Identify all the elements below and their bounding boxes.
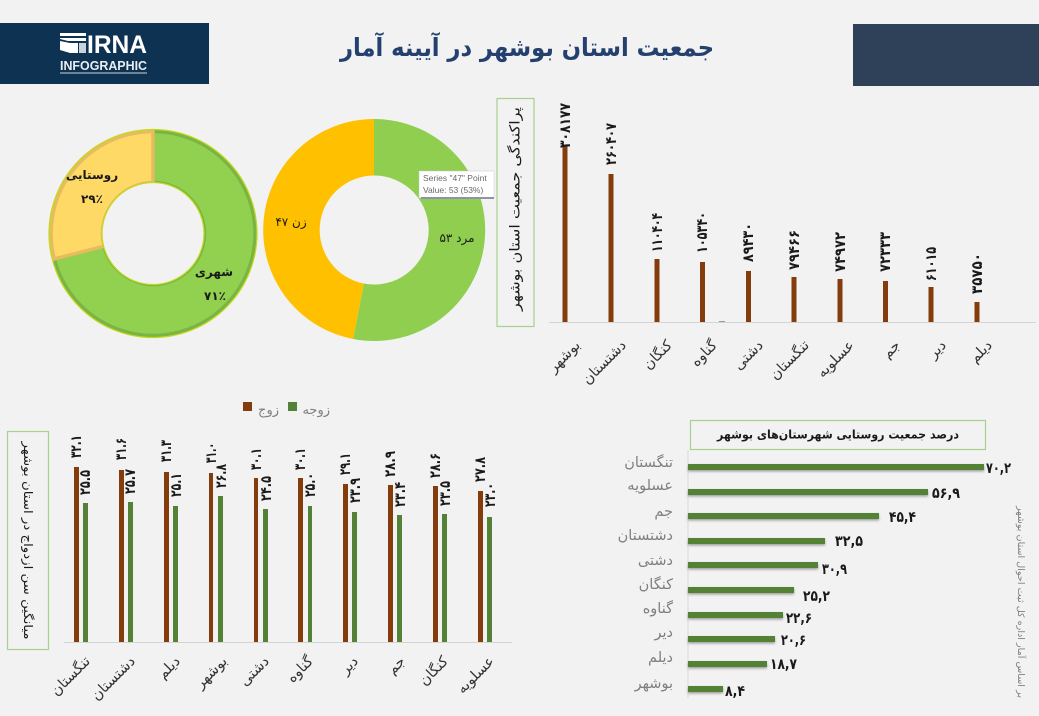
category labels: عسلویه: [454, 654, 498, 697]
bride value labels: ۲۶.۸: [212, 464, 230, 488]
bride value labels: ۲۵.۰: [301, 473, 319, 497]
groom value labels: ۳۰.۱: [247, 448, 265, 470]
icon: IRNA flag mark: [60, 33, 86, 53]
segment: rural 29%: [51, 132, 153, 259]
category labels: دشتی: [731, 338, 767, 374]
segment: men 53: [353, 119, 485, 341]
category labels: دیر: [925, 338, 950, 363]
category labels: دیر: [654, 625, 673, 641]
logo wordmark: IRNA: [87, 31, 147, 59]
category labels: بوشهر: [634, 676, 673, 692]
tooltip: Value: 53 (53%): [423, 185, 483, 195]
label: rural value: ۲۹٪: [81, 192, 103, 206]
value labels: ۳۰,۹: [822, 560, 847, 578]
category labels: دیلم: [155, 654, 184, 682]
category labels: جم: [384, 654, 409, 678]
label: rural: روستایی: [66, 168, 118, 183]
header band: right block: [853, 24, 1039, 86]
category labels: دیلم: [648, 650, 673, 666]
groom value labels: ۲۸.۶: [426, 453, 444, 478]
category labels: کنگان: [416, 653, 452, 689]
value labels: ۱۰۵۳۴۰: [693, 212, 711, 253]
bars: [688, 464, 984, 692]
category labels: دشتی: [237, 654, 273, 690]
groom value labels: ۲۷.۸: [471, 457, 489, 482]
label: women: زن ۴۷: [275, 215, 307, 230]
category labels: تنگستان: [624, 454, 673, 471]
heading box: population distribution: پراکندگی جمعیت استان بوشهر: [506, 107, 524, 312]
value labels: ۷۰,۲: [986, 459, 1011, 477]
category labels: دیر: [337, 654, 362, 679]
bride value labels: ۲۳.۹: [346, 478, 364, 503]
legend: زوجه: [302, 403, 330, 418]
value labels: ۷۴۹۷۲: [831, 232, 849, 272]
groom value labels: [67, 435, 489, 482]
category labels: [47, 653, 498, 704]
label: men: مرد ۵۳: [439, 231, 475, 246]
bride bars: [83, 496, 492, 642]
bar chart: marriage age by county: [47, 435, 512, 704]
category labels: گناوه: [643, 600, 673, 617]
groom bars: [74, 467, 483, 642]
category labels: دیلم: [967, 338, 996, 366]
category labels: جم: [879, 338, 904, 362]
value labels: ۳۵۷۵۰: [968, 253, 986, 294]
heading box: rural population percentage: درصد جمعیت روستایی شهرستان‌های بوشهر: [716, 428, 959, 442]
category labels: تنگستان: [47, 653, 94, 699]
value labels: ۸,۴: [725, 682, 745, 700]
heading box: average marriage age: میانگین سن ازدواج در استان بوشهر: [20, 440, 35, 640]
category labels: [618, 454, 673, 692]
bride value labels: ۲۵.۵: [76, 470, 94, 495]
label: urban value: ۷۱٪: [204, 289, 226, 303]
category labels: گناوه: [687, 337, 721, 370]
category labels: تنگستان: [766, 337, 813, 383]
category labels: عسلویه: [814, 338, 858, 381]
bride value labels: ۲۵.۱: [167, 473, 185, 497]
value labels: ۲۵,۲: [803, 587, 830, 605]
source note: بر اساس آمار اداره کل ثبت احوال استان بوشهر: [1015, 505, 1027, 698]
legend: [243, 402, 330, 418]
heading box: average marriage age: [8, 432, 48, 650]
category labels: [545, 337, 996, 388]
donut chart: urban and rural population: [49, 130, 257, 338]
groom value labels: ۳۱.۰: [202, 443, 220, 463]
bride value labels: ۲۳.۴: [391, 482, 409, 507]
header band: IRNA logo: [0, 23, 209, 84]
bride value labels: ۲۳.۵: [436, 481, 454, 506]
value labels: ۳۰۸۱۷۷: [556, 103, 574, 148]
category labels: کنگان: [639, 576, 673, 593]
groom value labels: ۲۹.۱: [336, 453, 354, 475]
value labels: ۸۹۴۳۰: [739, 223, 757, 262]
value labels: ۲۰,۶: [781, 631, 806, 649]
tooltip: [419, 171, 494, 199]
category labels: بوشهر: [192, 654, 231, 693]
value labels: ۴۵,۴: [889, 508, 916, 526]
bride value labels: ۲۵.۷: [121, 469, 139, 494]
value labels: [556, 103, 986, 294]
value labels: ۱۱۰۴۰۴: [648, 213, 666, 252]
bar chart: rural population by county: [618, 450, 1011, 700]
tooltip: Series "47" Point: [423, 173, 487, 183]
category labels: دشتستان: [618, 528, 673, 544]
heading box: population distribution: [497, 98, 534, 326]
bar chart: population by county: [545, 103, 1036, 388]
category labels: عسلویه: [627, 478, 673, 494]
value labels: ۶۱۰۱۵: [922, 247, 940, 281]
value labels: [725, 459, 1011, 700]
segment: women 47: [263, 119, 374, 339]
category labels: دشتستان: [88, 654, 139, 704]
value labels: ۱۸,۷: [770, 655, 797, 673]
bride value labels: ۲۳.۰: [481, 483, 499, 507]
category labels: دشتستان: [579, 338, 630, 388]
value labels: ۷۲۳۳۳: [876, 232, 894, 272]
category labels: جم: [654, 504, 673, 520]
bride value labels: ۲۴.۵: [257, 476, 275, 501]
value labels: ۳۲,۵: [835, 532, 863, 550]
value labels: ۷۹۴۶۶: [785, 230, 803, 270]
segment: urban 71%: [54, 131, 255, 336]
heading box: rural population percentage: [690, 420, 986, 450]
value labels: ۲۲,۶: [786, 609, 812, 627]
value labels: ۵۶,۹: [932, 484, 960, 502]
category labels: بوشهر: [545, 338, 584, 377]
category labels: دشتی: [638, 553, 673, 569]
category labels: کنگان: [640, 337, 676, 373]
groom value labels: ۳۱.۳: [157, 440, 175, 462]
groom value labels: ۳۱.۶: [112, 438, 130, 460]
groom value labels: ۲۸.۹: [381, 451, 399, 477]
value labels: ۲۶۰۴۰۷: [602, 123, 620, 165]
logo subtitle: INFOGRAPHIC: [60, 58, 148, 73]
groom value labels: ۳۲.۱: [67, 435, 85, 458]
label: urban: شهری: [195, 265, 233, 279]
groom value labels: ۳۰.۱: [291, 448, 309, 470]
donut chart: men and women: [263, 119, 494, 341]
legend: زوج: [258, 403, 279, 418]
bride value labels: [76, 464, 499, 507]
title: جمعیت استان بوشهر در آیینه آمار: [338, 32, 714, 63]
bars: [562, 145, 980, 322]
category labels: گناوه: [283, 653, 317, 686]
